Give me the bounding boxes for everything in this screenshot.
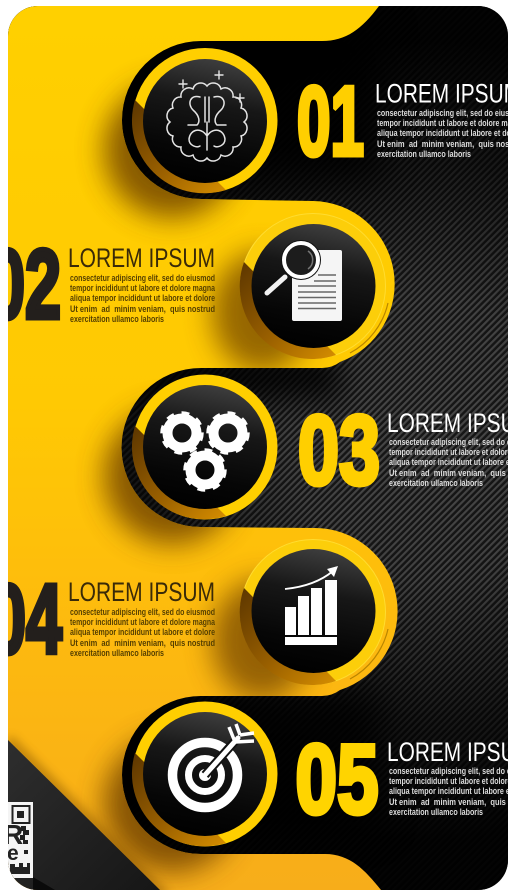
icon: brain (167, 71, 247, 161)
number 01: 01 (297, 66, 364, 176)
heading 4: LOREM IPSUM (68, 577, 215, 607)
text block 4: aliqua tempor incididunt ut labore et dolore (70, 626, 215, 637)
cast shadows on ribbon (8, 82, 312, 896)
text block 2: aliqua tempor incididunt ut labore et dolore (70, 292, 215, 303)
text block 1: exercitation ullamco laboris (377, 148, 471, 159)
text block 2: consectetur adipiscing elit, sed do eiusmod (70, 272, 215, 283)
circle badge 2 (240, 214, 388, 359)
QR code: e (7, 842, 19, 865)
text block 1 (377, 110, 508, 157)
text block 2: tempor incididunt ut labore et dolore magna (70, 282, 216, 293)
step 5 (132, 702, 516, 846)
circle badge 5 (132, 702, 278, 846)
icon: rising bar chart (285, 566, 338, 645)
icon: magnifier over document (267, 240, 342, 321)
step 4 (0, 540, 388, 685)
icon: target with arrow (172, 724, 254, 808)
number 03: 03 (298, 395, 380, 505)
text block 4: exercitation ullamco laboris (70, 647, 164, 658)
text block 4: consectetur adipiscing elit, sed do eiusmod (70, 606, 215, 617)
circle badge 1 (132, 48, 278, 193)
text block 3: exercitation ullamco laboris (389, 477, 483, 488)
icon: gears (162, 414, 248, 490)
text block 2 (70, 272, 216, 324)
text block 3 (389, 438, 508, 486)
step 3 (132, 374, 516, 520)
heading 2: LOREM IPSUM (68, 243, 215, 273)
QR code: R (3, 819, 23, 850)
QR code (8, 802, 33, 878)
text block 4: Ut enim ad minim veniam, quis nostrud (70, 637, 215, 648)
number 05: 05 (296, 724, 378, 834)
circle badge 4 (240, 540, 388, 685)
text block 2: Ut enim ad minim veniam, quis nostrud (70, 303, 215, 314)
dark corner strip (8, 740, 160, 890)
text block 2: exercitation ullamco laboris (70, 313, 164, 324)
step 2 (0, 214, 388, 359)
text block 4: tempor incididunt ut labore et dolore magna (70, 616, 216, 627)
text block 5: exercitation ullamco laboris (389, 806, 483, 817)
text block 4 (70, 606, 216, 658)
text block 5 (389, 768, 508, 815)
circle badge 3 (132, 374, 278, 520)
panel: yellow ribbon (8, 6, 398, 890)
step 1 (132, 48, 516, 193)
